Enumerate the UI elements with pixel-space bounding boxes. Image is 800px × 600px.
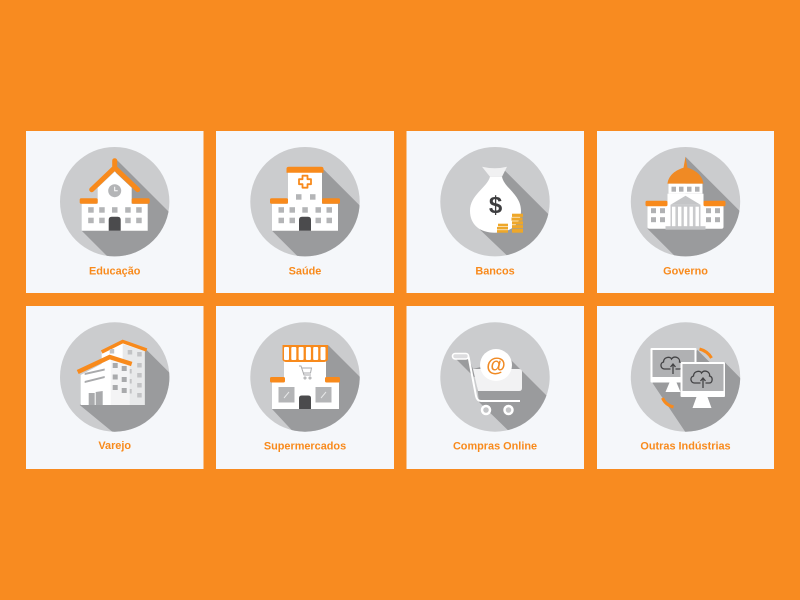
at sign: @ [486,354,506,376]
icon: capitol building [630,147,740,256]
dollar sign: $ [489,192,503,219]
icon: supermarket [250,322,360,432]
label: Outras Indústrias: Outras Indústrias [640,440,731,452]
icon: school [60,147,170,256]
label: Saúde: Saúde [289,266,321,278]
icon: office buildings [60,322,170,432]
panel: Saúde [216,131,394,293]
label: Educação: Educação [89,266,141,278]
awning [282,345,328,362]
icon: money bag [440,147,550,256]
label: Compras Online: Compras Online [453,440,537,452]
cart glyph [299,366,312,379]
icon: shopping cart [440,322,550,432]
panel: Educação [26,131,204,293]
panel: Supermercados [216,306,394,469]
monitor 2 [680,362,725,408]
label: Governo: Governo [663,266,708,278]
label: Supermercados: Supermercados [264,440,346,452]
icon: computers with cloud [630,322,740,432]
label: Bancos: Bancos [475,266,515,278]
coins [497,214,523,233]
monitor 1 [650,348,696,392]
panel: Compras Online [406,306,584,469]
icon: hospital [250,147,360,256]
panel: Outras Indústrias [597,306,774,469]
panel: Governo [597,131,774,293]
wheels [482,406,490,414]
panel: Varejo [26,306,204,469]
label: Varejo: Varejo [98,440,131,452]
sync arrows [662,349,712,407]
panel: Bancos [406,131,584,293]
